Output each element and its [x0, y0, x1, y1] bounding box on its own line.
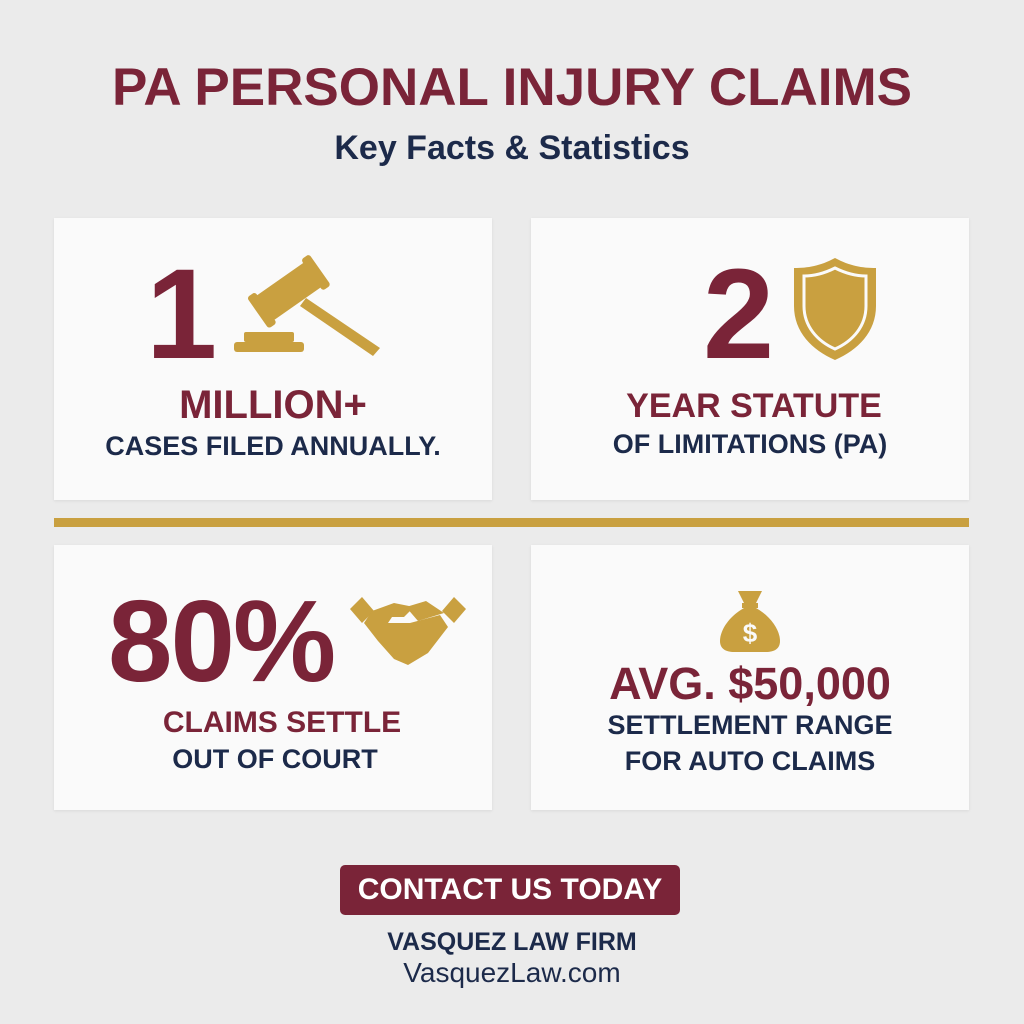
divider bar: [54, 518, 969, 527]
icon: gavel: [234, 255, 380, 356]
panel: settle: [54, 545, 492, 810]
description: CASES FILED ANNUALLY.: [105, 431, 441, 461]
button: contact: [340, 865, 680, 915]
button: contact: CONTACT US TODAY: [358, 873, 662, 906]
big number 2: 2: [703, 243, 774, 386]
panel: statute: [531, 218, 969, 500]
big number 1: 1: [146, 243, 217, 386]
stat label: YEAR STATUTE: [626, 387, 882, 425]
subtitle: Key Facts & Statistics: [334, 129, 690, 167]
description: SETTLEMENT RANGE: [607, 710, 892, 740]
panel: cases filed: [54, 218, 492, 500]
icon: handshake: [350, 597, 466, 665]
description: OUT OF COURT: [172, 744, 378, 774]
description: FOR AUTO CLAIMS: [625, 746, 875, 776]
stat label: CLAIMS SETTLE: [163, 706, 401, 739]
firm name: VASQUEZ LAW FIRM: [387, 928, 637, 956]
description: [607, 710, 892, 776]
description: OF LIMITATIONS (PA): [613, 429, 887, 459]
icon: money bag: $: [743, 618, 758, 648]
panel: settlement: [531, 545, 969, 810]
title: PA PERSONAL INJURY CLAIMS: [112, 58, 912, 117]
stat value: AVG. $50,000: [609, 658, 891, 709]
website: VasquezLaw.com: [403, 957, 621, 988]
icon: money bag: [720, 591, 780, 652]
icon: shield: [794, 258, 876, 360]
stat label: MILLION+: [179, 383, 367, 427]
big number 80%: 80%: [108, 576, 334, 706]
